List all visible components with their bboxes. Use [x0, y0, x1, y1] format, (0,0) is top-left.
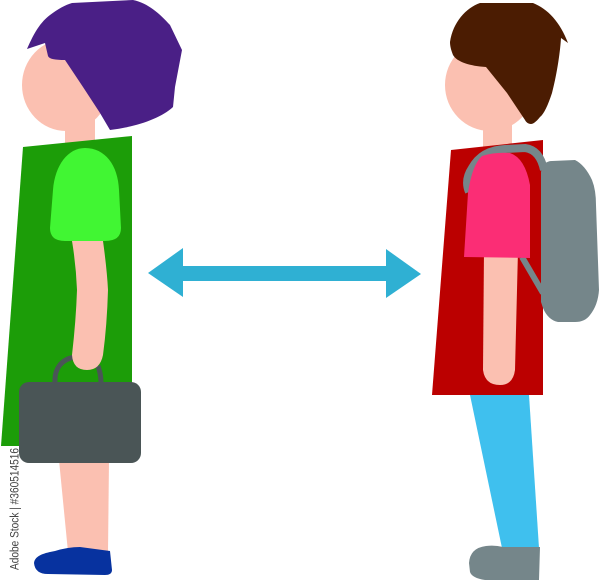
sleeve: light green — [50, 148, 121, 241]
sleeve: pink — [464, 153, 530, 258]
hair: purple — [27, 0, 182, 130]
shoe: grey — [469, 546, 540, 580]
hair: brown — [450, 3, 568, 124]
face — [445, 39, 535, 131]
trousers: light blue — [470, 395, 539, 548]
shoe: blue — [34, 547, 112, 575]
neck — [483, 118, 512, 148]
backpack lower strap — [522, 257, 543, 293]
stock id caption: Adobe Stock | #360514516 — [10, 448, 22, 570]
double-headed arrow — [148, 248, 421, 298]
backpack — [541, 160, 599, 322]
arm — [72, 241, 108, 370]
right person — [432, 3, 599, 580]
left person — [1, 0, 182, 575]
leg — [59, 460, 109, 552]
red jacket — [432, 140, 543, 395]
backpack upper strap — [467, 148, 544, 192]
arm — [483, 250, 518, 385]
briefcase handle — [55, 357, 101, 383]
face — [22, 39, 110, 131]
neck — [65, 118, 95, 148]
green jacket — [1, 136, 132, 446]
briefcase — [19, 382, 141, 463]
